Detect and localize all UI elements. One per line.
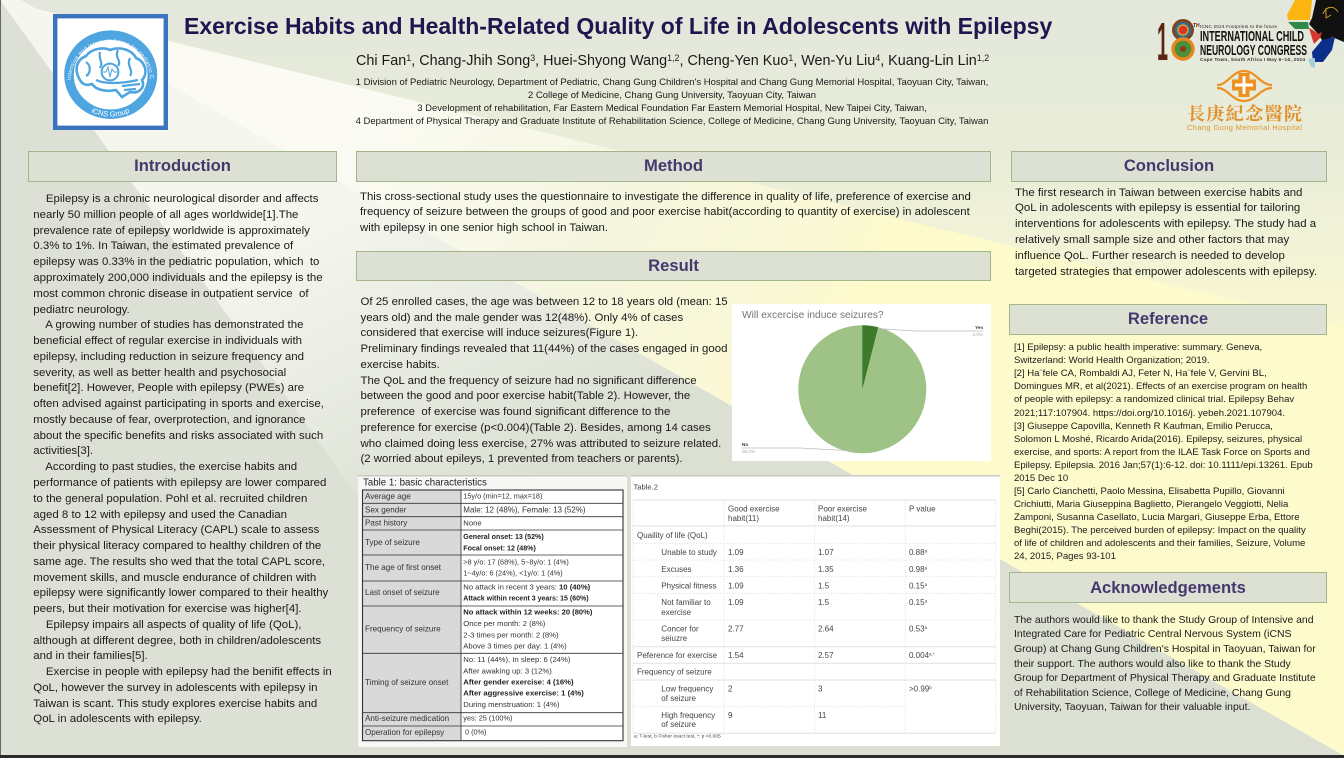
heading: Conclusion: Conclusion	[1124, 156, 1214, 175]
text: introduction: epilepsy was 0.33% in the pediatric population, which to	[33, 256, 319, 268]
text: introduction: Exercise in people with epilepsy had the benifit effects in	[46, 666, 332, 678]
logo: ICNC 2024 congress: Cape Town, South Africa I May 6–10, 2024	[1200, 57, 1305, 63]
text: references: 2021;117:107904. https://doi.org/10.1016/j. yebeh.2021.107904.	[1014, 408, 1285, 418]
title: Exercise Habits and Health-Related Quality of Life in Adolescents with Epilepsy	[184, 13, 1052, 39]
text: introduction: peers, but their motivation for exercise was higher[4].	[33, 603, 302, 615]
table 2: exercise habit comparison: Concer for	[661, 624, 699, 634]
table 2: exercise habit comparison: Poor exercise	[818, 504, 867, 514]
logo: ICNC 2024 congress	[1157, 0, 1344, 72]
text: acknowledgements: Group) at Chang Gung Children's Hospital in Taoyuan, Taiwan for	[1014, 644, 1316, 655]
text: references: [2] Ha¨fele CA, Rombaldi AJ, Feter N, Ha¨fele V, Gervini BL,	[1014, 368, 1267, 379]
text: introduction	[33, 193, 332, 725]
text: introduction: nearly 50 million people of all ages worldwide[1].The	[33, 209, 298, 221]
text: result: who claimed doing less exercise, 27% was attributed to seizure related.	[360, 438, 721, 450]
heading: Result: Result	[648, 256, 699, 274]
table 1: basic characteristics: Male: 12 (48%), Female: 13 (52%)	[463, 506, 586, 515]
chart: will exercise induce seizures pie: Yes	[975, 325, 983, 330]
text: introduction: epilepsy, including reduction in seizure frequency and	[33, 351, 304, 363]
table 1: basic characteristics: Timing of seizure onset	[365, 678, 449, 687]
table 2: exercise habit comparison: 2	[728, 684, 733, 694]
text: acknowledgements: The authors would like to thank the Study Group of Intensive and	[1014, 615, 1314, 626]
table 2: exercise habit comparison: 0.98	[909, 565, 925, 574]
text: result: preference for exercise (p<0.004)(Table 2). Besides, among 14 cases	[360, 422, 711, 434]
table 2: exercise habit comparison: 0.53	[909, 624, 925, 634]
table 1: basic characteristics: Last onset of seizure	[365, 588, 440, 597]
text: introduction: their physical literacy compared to healthy children of the	[33, 540, 321, 552]
table 2: exercise habit comparison: 0.004	[909, 651, 929, 660]
table 2: exercise habit comparison: a: T-test, b Fisher exact test, *: p <0.005	[634, 734, 721, 740]
text: introduction: severity, as well as better health and psychosocial	[33, 367, 286, 379]
table 2: exercise habit comparison: 1.09	[728, 582, 744, 590]
text: result: The QoL and the frequency of seizure had no significant difference	[360, 375, 697, 387]
text: conclusion: targeted strategies that empower adolescents with epilepsy.	[1015, 266, 1317, 278]
heading: Reference	[1009, 304, 1327, 334]
text: conclusion: QoL in adolescents with epilepsy is essential for tailoring	[1015, 202, 1300, 214]
table 2: exercise habit comparison: a	[925, 565, 928, 570]
text: result: years old) and the male gender was 12(48%). Only 4% of cases	[360, 312, 683, 324]
table 2: exercise habit comparison: a	[925, 625, 928, 630]
logo: iCNS Group	[53, 14, 168, 130]
table 1: basic characteristics: 0 (0%)	[465, 728, 486, 737]
table 1: basic characteristics: Frequency of seizure	[365, 625, 441, 634]
table 1: basic characteristics: During menstruation: 1 (4%)	[463, 700, 560, 709]
heading: Result	[356, 250, 991, 281]
table 2: exercise habit comparison: Low frequency	[661, 684, 713, 694]
logo: Chang Gung Memorial Hospital: 長庚紀念醫院	[1187, 100, 1302, 126]
table 1: basic characteristics: Type of seizure	[365, 538, 420, 547]
table 2: exercise habit comparison: 2.77	[728, 624, 744, 634]
table 1: basic characteristics: Table 1: basic characteristics	[363, 478, 487, 488]
text: references: [3] Giuseppe Capovilla, Kenneth R Kaufman, Emilio Perucca,	[1014, 421, 1273, 432]
table 1: basic characteristics: 15y/o (min=12, max=18)	[463, 492, 542, 501]
table 2: exercise habit comparison: a	[925, 598, 928, 604]
affiliations: 3 Development of rehabilitation, Far Eastern Medical Foundation Far Eastern Memorial Hospital, New Taipei City, Taiwan,	[417, 102, 927, 114]
text: references: Beghi(2015). The perceived burden of epilepsy: Impact on the quality	[1014, 525, 1306, 536]
authors: Chi Fan1, Chang-Jhih Song3, Huei-Shyong Wang1,2, Cheng-Yen Kuo1, Wen-Yu Liu4, Kuang-Lin Lin1,2	[356, 53, 989, 69]
table 2: exercise habit comparison: of seizure	[661, 694, 697, 703]
text: method: This cross-sectional study uses the questionnaire to investigate the difference in quality of life, preference of exercise and	[360, 190, 971, 202]
heading: Introduction: Introduction	[134, 156, 231, 175]
text: introduction: Epilepsy impairs all aspects of quality of life (QoL),	[46, 619, 301, 631]
text: introduction: activities[3].	[33, 445, 93, 457]
affiliations: 4 Department of Physical Therapy and Graduate Institute of Rehabilitation Science, College of Medicine, Chang Gung University, Taoyuan City, Taiwan	[356, 116, 988, 126]
text: introduction: often advised against participating in sports and exercise,	[33, 398, 324, 410]
text: introduction: A growing number of studies has demonstrated the	[45, 319, 303, 331]
table 1: basic characteristics: After awaking up: 3 (12%)	[463, 666, 552, 675]
text: introduction: movement skills, and muscle endurance of children with	[33, 572, 316, 584]
table 1: basic characteristics: Anti-seizure medication	[365, 714, 449, 723]
logo: Chang Gung Memorial Hospital	[1187, 71, 1302, 132]
table 2: exercise habit comparison: 9	[728, 711, 733, 720]
table 2: exercise habit comparison: Not familiar to	[661, 598, 711, 607]
table 1: basic characteristics: Sex gender	[365, 506, 407, 515]
table 2: exercise habit comparison: Good exercise	[728, 504, 780, 514]
text: references: of life of children and adolescents and their families, Seizure, Volume	[1014, 538, 1305, 549]
text: result: between the good and poor exercise habit(Table 2). However, the	[360, 390, 690, 402]
table 2: exercise habit comparison: 1.5	[818, 582, 830, 590]
table 2: exercise habit comparison: a	[925, 548, 928, 554]
table 2: exercise habit comparison: 1.35	[818, 565, 834, 574]
table 1: basic characteristics: Past history	[365, 519, 408, 528]
text: introduction: pediatrc neurology.	[33, 304, 130, 316]
text: acknowledgements: of Rehabilitation Science, College of Medicine, Chang Gung	[1014, 688, 1291, 699]
table 2: exercise habit comparison: >0.99	[909, 684, 929, 694]
text: introduction: QoL, however the survey in adolescents with epilepsy in	[33, 682, 317, 694]
text: references: Switzerland: World Health Organization; 2019.	[1014, 355, 1210, 366]
table 1: basic characteristics: Attack within recent 3 years: 15 (60%)	[463, 596, 589, 603]
affiliations	[356, 76, 988, 126]
text: result: preference of exercise was found significant difference to the	[360, 406, 670, 418]
text: conclusion	[1015, 187, 1317, 278]
text: introduction: Epilepsy is a chronic neurological disorder and affects	[46, 193, 318, 205]
text: acknowledgements	[1014, 615, 1316, 713]
table 2: exercise habit comparison: 1.36	[728, 565, 744, 574]
table 2: exercise habit comparison: b	[929, 685, 932, 690]
heading: Acknowledgements	[1009, 572, 1327, 603]
text: references: Crichiutti, Maria Giuseppina Baglietto, Pierangelo Veggiotti, Nelia	[1014, 499, 1288, 510]
heading: Conclusion	[1011, 151, 1327, 182]
text: references: 2015 Dec 10	[1014, 473, 1068, 484]
text: acknowledgements: their support. The authors would also like to thank the Study	[1014, 659, 1291, 670]
table 2: exercise habit comparison: High frequency	[661, 711, 715, 720]
text: introduction: most common chronic disease in outpatient service of	[33, 288, 309, 300]
table 1: basic characteristics: 2-3 times per month: 2 (8%)	[463, 630, 559, 639]
text: introduction: According to past studies, the exercise habits and	[45, 461, 297, 473]
text: references: of people with epilepsy: a randomized clinical trial. Epilepsy Behav	[1014, 394, 1294, 405]
heading: Reference: Reference	[1128, 309, 1208, 328]
chart: will exercise induce seizures pie: No	[742, 442, 748, 447]
text: references: [5] Carlo Cianchetti, Paolo Messina, Elisabetta Pupillo, Giovanni	[1014, 486, 1285, 497]
text: conclusion: influence QoL. Further research is needed to develop	[1015, 250, 1285, 262]
table 2: exercise habit comparison: 1.5	[818, 598, 830, 607]
table 2: exercise habit comparison: a,*	[929, 651, 935, 656]
text: references: 24, 2015, Pages 93-101	[1014, 551, 1116, 562]
text: introduction: 0.3% to 1%. In Taiwan, the estimated prevalence of	[33, 240, 293, 252]
table 2: exercise habit comparison: of seizure	[661, 720, 697, 729]
text: result: Of 25 enrolled cases, the age was between 12 to 18 years old (mean: 15	[360, 296, 728, 308]
logo: ICNC 2024 congress: ICNC 2024 Footprints to the future	[1200, 24, 1277, 29]
text: introduction: about the specific benefits and risks associated with such	[33, 430, 323, 442]
table 2: exercise habit comparison: Frequency of seizure	[637, 668, 712, 676]
logo: ICNC 2024 congress: 1	[1157, 12, 1168, 72]
text: references: Epilepsy. Epilepsia. 2016 Jan;57(1):6-12. doi: 10.1111/epi.13261. Epub	[1014, 460, 1313, 471]
text: introduction: approximately 200,000 individuals and the epilepsy is the	[33, 272, 323, 284]
text: acknowledgements: Group for Department of Physical Therapy and Graduate Institute	[1014, 673, 1316, 684]
text: result: (2 worried about epileys, 1 prevented from teachers or parents).	[360, 453, 683, 465]
text: conclusion: The first research in Taiwan between exercise habits and	[1015, 187, 1302, 199]
table 1: basic characteristics: 1~4y/o: 6 (24%), <1y/o: 1 (4%)	[463, 568, 563, 577]
table 1: basic characteristics: Operation for epilepsy	[365, 728, 445, 737]
affiliations: 2 College of Medicine, Chang Gung University, Taoyuan City, Taiwan	[528, 90, 816, 100]
chart: will exercise induce seizures pie	[732, 304, 991, 461]
text: conclusion: interventions for adolescents with epilepsy. The study had a	[1015, 218, 1316, 230]
text: introduction: beneficial effect of regular exercise in individuals with	[33, 335, 302, 347]
table 2: exercise habit comparison: exercise	[661, 608, 692, 617]
affiliations: 1 Division of Pediatric Neurology, Department of Pediatric, Chang Gung Children's Hospital and Chang Gung Memorial Hospital, Taoyuan City, Taiwan,	[356, 76, 988, 88]
text: result	[360, 296, 728, 465]
table 1: basic characteristics: Focal onset: 12 (48%)	[463, 544, 536, 552]
heading: Acknowledgements: Acknowledgements	[1090, 578, 1246, 597]
table 2: exercise habit comparison: 2.57	[818, 651, 834, 660]
table 2: exercise habit comparison: 1.07	[818, 548, 834, 557]
table 2: exercise habit comparison: 1.09	[728, 548, 744, 557]
text: references: Solomon L Moshé, Ricardo Arida(2016). Epilepsy, seizures, physical	[1014, 434, 1302, 445]
text: method: with epilepsy in one senior high school in Taiwan.	[360, 222, 608, 234]
table 1: basic characteristics: After aggressive exercise: 1 (4%)	[463, 689, 584, 698]
logo: Chang Gung Memorial Hospital: Chang Gung Memorial Hospital	[1187, 123, 1302, 132]
heading: Method: Method	[644, 156, 703, 175]
table 2: exercise habit comparison: P value	[909, 504, 936, 514]
table 1: basic characteristics: No attack in recent 3 years: 10 (40%)	[463, 582, 591, 591]
table 2: exercise habit comparison: seiuzre	[661, 634, 688, 643]
table 2: exercise habit comparison: Quaility of life (QoL)	[637, 531, 708, 540]
table 2: exercise habit comparison: Excuses	[661, 565, 692, 574]
table 1: basic characteristics: Above 3 times per day: 1 (4%)	[463, 641, 567, 650]
text: method: frequency of seizure between the groups of good and poor exercise habit(according to quantity of exercise) in adolescent	[360, 206, 970, 218]
text: introduction: aged 8 to 12 with epilepsy and used the Canadian	[33, 508, 287, 520]
chart: will exercise induce seizures pie: 4.0%	[973, 332, 983, 337]
text: references: Zamponi, Susanna Casellato, Lucia Margari, Giuseppe Erba, Ettore	[1014, 512, 1300, 523]
table 2: exercise habit comparison: 1.54	[728, 651, 744, 660]
table 1: basic characteristics: After gender exercise: 4 (16%)	[463, 678, 574, 687]
text: introduction: mostly because of fear, overprotection, and ignorance	[33, 414, 305, 426]
table 2: exercise habit comparison: 0.15	[909, 582, 925, 590]
text: acknowledgements: University, Taoyuan, Taiwan for their valuable input.	[1014, 702, 1250, 713]
text: references: exercise, and sports: A report from the ILAE Task Force on Sports and	[1014, 447, 1310, 458]
table 1: basic characteristics: None	[463, 519, 482, 528]
text: introduction: prevalence rate of epilepsy worldwide is approximately	[33, 225, 310, 237]
text: result: exercise habits.	[360, 359, 440, 371]
table 1: basic characteristics	[358, 475, 627, 747]
table 1: basic characteristics: The age of first onset	[365, 563, 442, 572]
table 1: basic characteristics: Average age	[365, 492, 411, 501]
logo: iCNS Group: iCNS Group	[92, 108, 130, 116]
text: conclusion: relatively small sample size and other factors that may	[1015, 234, 1289, 246]
text: references: Domingues MR, et al(2021). Effects of an exercise program on health	[1014, 381, 1307, 392]
table 2: exercise habit comparison: Table.2	[634, 482, 658, 492]
table 2: exercise habit comparison: 2.64	[818, 624, 834, 634]
text: references: [1] Epilepsy: a public health imperative: summary. Geneva,	[1014, 342, 1262, 353]
table 2: exercise habit comparison: 3	[818, 684, 823, 694]
text: introduction: and in their families[5].	[33, 650, 148, 662]
text: introduction: same age. The results sho wed that the total CAPL score,	[33, 556, 325, 568]
text: introduction: Taiwan is scant. This study explores exercise habits and	[33, 698, 317, 710]
text: result: considered that exercise will induce seizures(Figure 1).	[360, 327, 638, 339]
table 1: basic characteristics: No attack within 12 weeks: 20 (80%)	[463, 607, 593, 616]
text: references	[1014, 342, 1313, 562]
table 2: exercise habit comparison: 0.88	[909, 548, 925, 557]
text: introduction: performance of patients with epilepsy are lower compared	[33, 477, 326, 489]
table 1: basic characteristics: >8 y/o: 17 (68%), 5~8y/o: 1 (4%)	[463, 557, 569, 566]
table 2: exercise habit comparison: Peference for exercise	[637, 651, 718, 660]
table 2: exercise habit comparison: habit(14)	[818, 514, 850, 523]
table 2: exercise habit comparison: 11	[818, 711, 827, 720]
table 2: exercise habit comparison: Physical fitness	[661, 582, 716, 590]
logo: ICNC 2024 congress: TH	[1193, 23, 1200, 29]
text: result: Preliminary findings revealed that 11(44%) of the cases engaged in good	[360, 343, 727, 355]
text: introduction: epilepsy were significantly lower compared to their healthy	[33, 587, 328, 599]
text: introduction: benefit[2]. However, People with epilepsy (PWEs) are	[33, 382, 304, 394]
text: introduction: QoL in adolescents with epilepsy.	[33, 713, 202, 725]
text: acknowledgements: Integrated Care for Pediatric Central Nervous System (iCNS	[1014, 629, 1291, 640]
table 1: basic characteristics: Once per month: 2 (8%)	[463, 619, 546, 628]
heading: Method	[356, 151, 991, 182]
table 2: exercise habit comparison: 0.15	[909, 598, 925, 607]
text: introduction: to the general population. Pohl et al. recruited children	[33, 493, 307, 505]
text: method	[360, 190, 971, 234]
table 2: exercise habit comparison: Unable to study	[661, 548, 717, 557]
table 2: exercise habit comparison: 1.09	[728, 598, 744, 607]
chart: will exercise induce seizures pie: Will excercise induce seizures?	[742, 310, 884, 321]
table 1: basic characteristics: General onset: 13 (52%)	[463, 533, 544, 541]
text: introduction: although at different degree, both in children/adolescents	[33, 635, 321, 647]
table 1: basic characteristics: yes: 25 (100%)	[463, 714, 512, 723]
chart: will exercise induce seizures pie: 96.0%	[742, 449, 755, 454]
table 1: basic characteristics: No: 11 (44%), In sleep: 6 (24%)	[463, 655, 571, 664]
text: introduction: Assessment of Physical Literacy (CAPL) scale to assess	[33, 524, 319, 536]
table 2: exercise habit comparison: a	[925, 582, 928, 587]
heading: Introduction	[28, 151, 337, 182]
table 2: exercise habit comparison	[631, 475, 1000, 746]
table 2: exercise habit comparison: habit(11)	[728, 514, 759, 523]
